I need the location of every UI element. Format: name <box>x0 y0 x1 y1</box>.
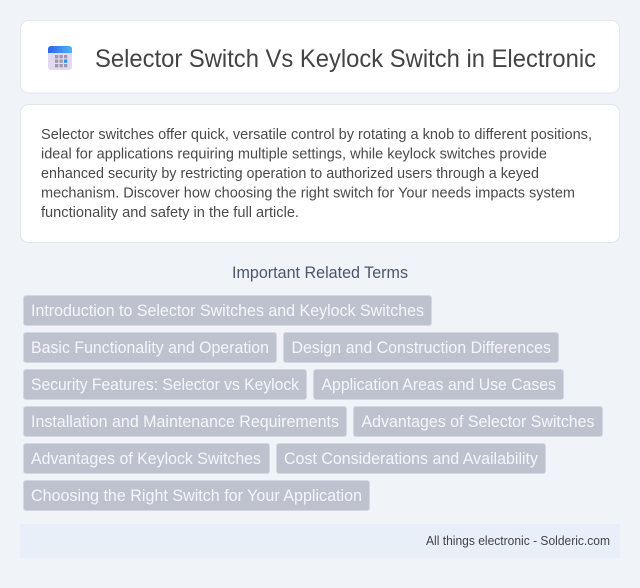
description text: mechanism. Discover how choosing the right switch for Your needs impacts system <box>41 186 575 202</box>
panel: description <box>20 104 620 242</box>
footer: All things electronic - Solderic.com <box>426 534 610 548</box>
footer <box>20 524 620 558</box>
tag: choosing <box>24 480 370 510</box>
tag: design differences: Design and Construction Differences <box>292 338 551 357</box>
description text: Selector switches offer quick, versatile control by rotating a knob to different positions, <box>41 127 592 143</box>
tag: advantages of selector: Advantages of Selector Switches <box>362 412 594 431</box>
tag: installation: Installation and Maintenance Requirements <box>31 412 339 431</box>
icon: calendar grid <box>48 46 72 70</box>
tag: advantages of selector <box>354 406 602 436</box>
tag: advantages of keylock: Advantages of Keylock Switches <box>31 449 261 468</box>
description text: functionality and safety in the full article. <box>41 205 299 221</box>
description text: enhanced security by restricting operation to authorized users through a keyed <box>41 166 539 182</box>
tag: basic functionality: Basic Functionality and Operation <box>31 338 269 357</box>
tag: introduction <box>24 296 432 326</box>
tag: basic functionality <box>24 332 276 362</box>
tag: application areas: Application Areas and Use Cases <box>322 375 556 394</box>
tag: advantages of keylock <box>24 444 270 474</box>
tag: cost: Cost Considerations and Availability <box>284 449 539 468</box>
tag: security features: Security Features: Selector vs Keylock <box>31 375 300 394</box>
tag: design differences <box>284 332 558 362</box>
description text <box>41 127 592 221</box>
tag: installation <box>24 406 346 436</box>
tag: choosing: Choosing the Right Switch for Your Application <box>31 486 362 505</box>
term tags <box>24 296 602 510</box>
panel: title card <box>20 20 620 93</box>
tag: introduction: Introduction to Selector Switches and Keylock Switches <box>31 301 424 320</box>
title: Selector Switch Vs Keylock Switch in Electronic <box>95 45 596 73</box>
tag: cost <box>276 444 546 474</box>
heading: related terms: Important Related Terms <box>232 263 408 282</box>
tag: security features <box>24 370 306 400</box>
description text: ideal for applications requiring multiple settings, while keylock switches provide <box>41 146 547 162</box>
tag: application areas <box>314 370 564 400</box>
